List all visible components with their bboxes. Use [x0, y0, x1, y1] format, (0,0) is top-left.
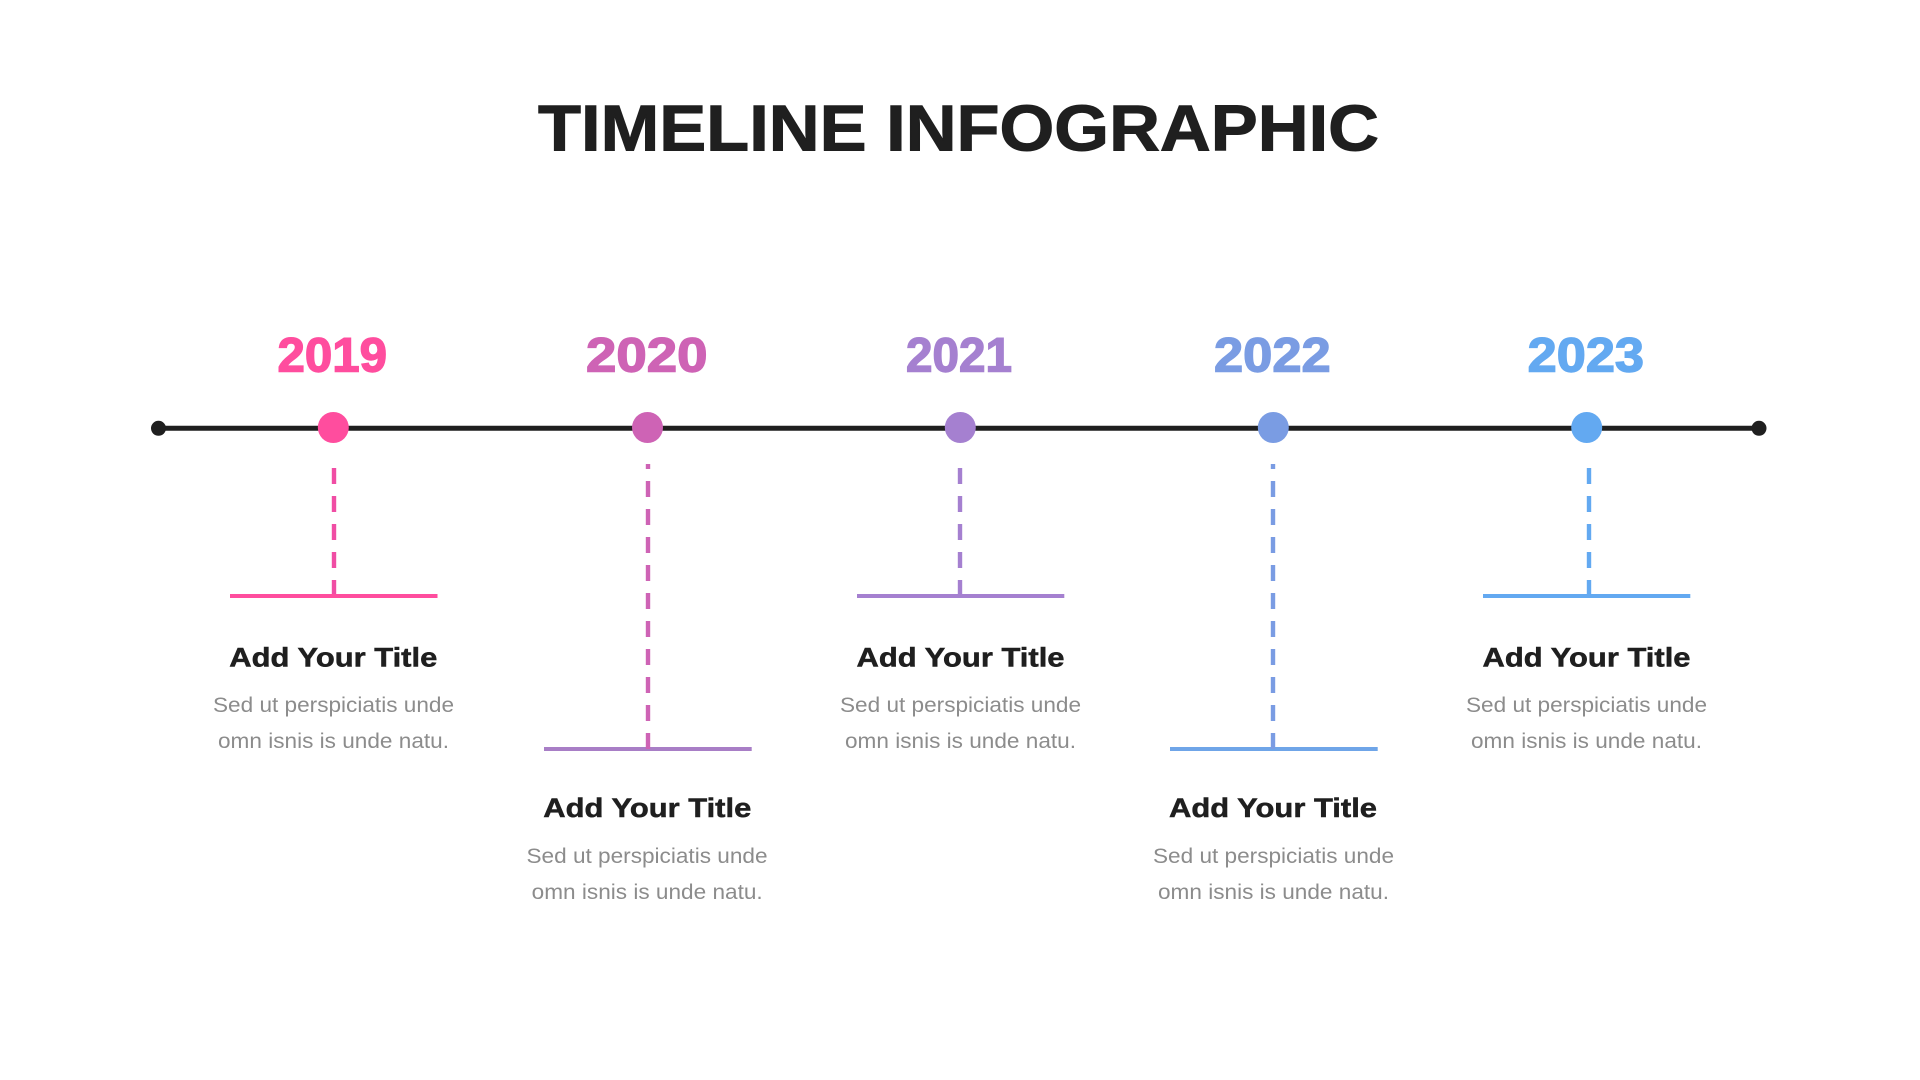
connector 2021	[958, 468, 962, 596]
text 2020	[526, 845, 768, 904]
milestone: 2019	[213, 330, 454, 753]
year 2020: 2020	[586, 330, 708, 382]
text 2020: omn isnis is unde natu.	[532, 881, 763, 904]
text 2021: omn isnis is unde natu.	[845, 730, 1076, 753]
heading 2023: Add Your Title	[1482, 643, 1690, 673]
text 2022	[1153, 845, 1394, 904]
bar 2023	[1483, 594, 1690, 598]
year 2019: 2019	[278, 330, 387, 382]
heading 2022: Add Your Title	[1169, 793, 1377, 823]
bar 2019	[230, 594, 438, 598]
connector 2022	[1271, 464, 1275, 749]
text 2022: Sed ut perspiciatis unde	[1153, 845, 1394, 868]
text 2021: Sed ut perspiciatis unde	[840, 694, 1081, 717]
marker 2022	[1258, 412, 1289, 443]
connector 2023	[1587, 468, 1591, 596]
text 2019: omn isnis is unde natu.	[218, 730, 449, 753]
year 2021: 2021	[906, 330, 1012, 382]
text 2023: omn isnis is unde natu.	[1471, 730, 1702, 753]
connector 2020	[646, 464, 650, 749]
text 2021	[840, 694, 1081, 753]
text 2019: Sed ut perspiciatis unde	[213, 694, 454, 717]
milestone: 2020	[526, 330, 768, 904]
text 2023: Sed ut perspiciatis unde	[1466, 694, 1707, 717]
text 2022: omn isnis is unde natu.	[1158, 881, 1389, 904]
marker 2019	[318, 412, 349, 443]
marker 2021	[945, 412, 976, 443]
title: TIMELINE INFOGRAPHIC	[538, 92, 1379, 165]
milestone: 2023	[1466, 330, 1707, 753]
connector 2019	[332, 468, 336, 596]
milestone: 2021	[840, 330, 1081, 753]
heading 2019: Add Your Title	[229, 643, 437, 673]
heading 2021: Add Your Title	[856, 643, 1064, 673]
heading 2020: Add Your Title	[543, 793, 751, 823]
year 2023: 2023	[1528, 330, 1644, 382]
text 2020: Sed ut perspiciatis unde	[526, 845, 768, 868]
milestone: 2022	[1153, 330, 1394, 904]
bar 2022	[1170, 747, 1378, 751]
year 2022: 2022	[1214, 330, 1331, 382]
marker 2023	[1571, 412, 1602, 443]
bar 2020	[544, 747, 752, 751]
bar 2021	[857, 594, 1064, 598]
timeline axis	[151, 421, 1766, 436]
text 2019	[213, 694, 454, 753]
marker 2020	[632, 412, 663, 443]
text 2023	[1466, 694, 1707, 753]
